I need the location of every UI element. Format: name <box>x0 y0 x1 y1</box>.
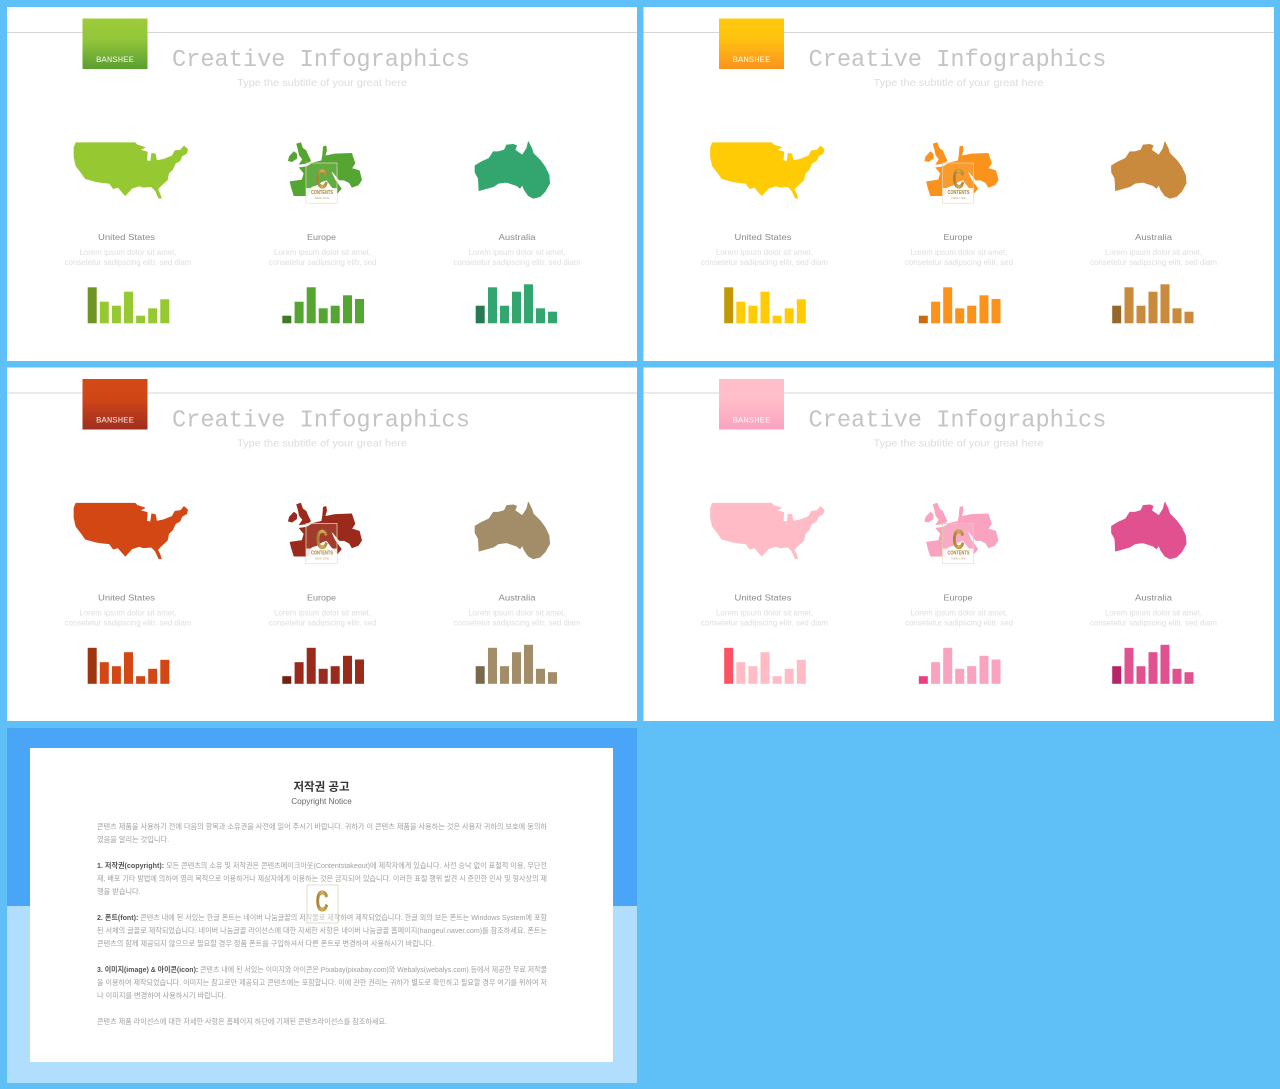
watermark logo <box>306 524 337 564</box>
label: United States: Lorem ipsum dolor sit amet, <box>80 608 176 618</box>
label: United States <box>701 232 828 267</box>
subtitle: Type the subtitle of your great here <box>874 438 1044 450</box>
label: Europe <box>268 232 376 267</box>
title band <box>719 18 784 69</box>
watermark logo: CONTENTS <box>311 550 334 556</box>
title band: BANSHEE <box>732 416 770 426</box>
title band <box>719 379 784 430</box>
label: Australia: Lorem ipsum dolor sit amet, <box>468 608 566 618</box>
section 2: font <box>97 913 547 948</box>
label: Australia: Australia <box>1135 592 1172 602</box>
subtitle: Type the subtitle of your great here <box>237 77 407 89</box>
heading: Creative Infographics <box>172 408 470 434</box>
section 3: image and icon <box>97 965 547 1000</box>
map: United States <box>74 503 188 559</box>
label: Europe: Europe <box>307 232 336 242</box>
intro paragraph <box>97 822 547 844</box>
section 3: image and icon: 나 이미지를 변경하여 사용하시기 바랍니다. <box>97 991 226 1000</box>
bar chart: Europe <box>282 287 364 323</box>
title band <box>82 18 148 69</box>
section 2: font: 2. 폰트(font): 콘텐츠 내에 된 서있는 한글 폰트는 네이버 나눔글꼴의 저작물로 제작하여 제작되었습니다. 한글 외의 보든 폰트는 Windows System에 포함 <box>97 913 547 922</box>
label: Europe: consetetur sadipscing elitr, sed <box>268 258 376 267</box>
watermark logo: CONTENTS <box>948 190 970 196</box>
subtitle: Type the subtitle of your great here <box>237 438 407 450</box>
label: Australia: Lorem ipsum dolor sit amet, <box>1105 248 1202 257</box>
label: Europe <box>905 232 1013 267</box>
watermark logo: NEW LIFE <box>315 196 329 200</box>
label: Europe <box>268 592 376 628</box>
watermark logo <box>942 163 974 203</box>
label: Australia: Lorem ipsum dolor sit amet, <box>468 248 566 257</box>
label: United States: Lorem ipsum dolor sit amet, <box>716 248 813 257</box>
panel: red slide <box>7 368 637 721</box>
bar chart: Australia <box>1112 284 1194 323</box>
map: Europe <box>925 143 998 196</box>
section 1: copyright <box>97 861 547 896</box>
watermark logo: NEW LIFE <box>951 196 966 200</box>
map: United States <box>74 143 188 198</box>
label: Europe: Europe <box>944 592 973 602</box>
title band <box>82 379 148 430</box>
panel: copyright notice <box>7 728 637 1083</box>
notice title: 저작권 공고 <box>293 780 350 794</box>
section 3: image and icon: 을 이용하여 제작되었습니다. 이미지는 참고로만 제공되고 콘텐츠에는 포함합니다. 이에 관한 권리는 귀하가 별도로 확인하고 필요할 경우 여기를 위하여 저 <box>97 978 547 987</box>
label: Europe: consetetur sadipscing elitr, sed <box>905 258 1013 267</box>
heading: Creative Infographics <box>172 47 470 74</box>
label: Australia: Australia <box>1135 232 1172 242</box>
label: Europe: consetetur sadipscing elitr, sed <box>268 618 376 628</box>
intro paragraph: 였음을 알리는 것입니다. <box>97 835 169 844</box>
label: United States <box>64 232 192 267</box>
label: Europe: Lorem ipsum dolor sit amet, <box>274 248 371 257</box>
section 1: copyright: 재, 배포 기타 방법에 의하여 영리 목적으로 이용하거나 제삼자에게 이용하는 것은 금지되어 있습니다. 이러한 표절 행위 발견 시 준민한 민사 및 형사상의 제 <box>97 874 547 883</box>
map: Europe <box>288 143 362 196</box>
label: Australia: consetetur sadipscing elitr, sed diam <box>454 258 581 267</box>
label: United States: United States <box>98 232 155 242</box>
watermark logo: C <box>316 886 328 918</box>
label: Europe: Europe <box>307 592 336 602</box>
label: Europe: Europe <box>944 232 973 242</box>
bar chart: Europe <box>282 648 364 684</box>
map: Europe <box>925 503 998 556</box>
label: United States: Lorem ipsum dolor sit amet, <box>80 248 176 257</box>
watermark logo: C <box>953 164 964 194</box>
section 2: font: 된 서체의 글꼴로 제작되었습니다. 네이버 나눔글꼴 라이선스에 대한 자세한 사항은 네이버 나눔글꼴 홈페이지(hangeul.naver.com)를 참조하세요. 폰트는 <box>97 926 547 935</box>
intro paragraph: 콘텐츠 제품을 사용하기 전에 다음의 항목과 소유권을 사전에 읽어 주시기 바랍니다. 귀하가 이 콘텐츠 제품을 사용하는 것은 사용자 귀하의 보호에 동의하 <box>97 822 547 831</box>
label: United States: consetetur sadipscing elitr, sed diam <box>701 258 828 267</box>
panel: green slide <box>7 7 637 361</box>
bar chart: United States <box>724 287 806 323</box>
title band: BANSHEE <box>96 55 134 65</box>
section 3: image and icon: 3. 이미지(image) & 아이콘(icon): 콘텐츠 내에 된 서있는 이미지와 아이콘은 Pixabay(pixabay.com)와 Webalys(webalys.com) 등에서 제공한 무료 저작물 <box>97 965 547 974</box>
section 1: copyright: 1. 저작권(copyright): 모든 콘텐츠의 소유 및 저작권은 콘텐츠메이크아웃(Contentstakeout)에 제작자에게 있습니다. 사전 승낙 없이 표절적 이용, 무단전 <box>97 861 547 870</box>
watermark logo <box>307 885 338 923</box>
label: United States <box>64 592 192 628</box>
label: Australia <box>1090 592 1217 628</box>
bar chart: Australia <box>1112 645 1194 684</box>
label: Australia: Lorem ipsum dolor sit amet, <box>1105 608 1202 618</box>
heading: Creative Infographics <box>808 47 1106 74</box>
label: United States: Lorem ipsum dolor sit amet, <box>716 608 813 618</box>
panel: pink slide <box>644 368 1274 721</box>
title band: BANSHEE <box>96 416 134 426</box>
heading: Creative Infographics <box>808 408 1106 434</box>
watermark logo: CONTENTS <box>311 190 334 196</box>
subtitle: Type the subtitle of your great here <box>874 77 1044 89</box>
label: Australia: consetetur sadipscing elitr, sed diam <box>454 618 581 628</box>
watermark logo: C <box>316 524 328 555</box>
watermark logo: NEW LIFE <box>951 556 966 560</box>
label: United States: consetetur sadipscing elitr, sed diam <box>64 258 192 267</box>
bar chart: Australia <box>476 284 557 323</box>
panel: yellow slide <box>644 7 1274 361</box>
watermark logo <box>942 524 974 564</box>
section 1: copyright: 행을 받습니다. <box>97 887 141 896</box>
label: Australia <box>454 232 581 267</box>
bar chart: Europe <box>919 648 1000 684</box>
label: United States: United States <box>734 232 792 242</box>
title band: BANSHEE <box>732 55 770 65</box>
label: Australia <box>454 592 581 628</box>
closing line: 콘텐츠 제품 라이선스에 대한 자세한 사항은 홈페이지 하단에 기재된 콘텐츠라이선스를 참조하세요. <box>97 1017 387 1026</box>
label: Australia: Australia <box>498 232 536 242</box>
bar chart: Australia <box>476 645 557 684</box>
label: Europe <box>905 592 1013 628</box>
watermark logo <box>306 163 337 203</box>
label: Europe: Lorem ipsum dolor sit amet, <box>910 608 1008 618</box>
label: Australia: consetetur sadipscing elitr, sed diam <box>1090 618 1217 628</box>
label: Australia <box>1090 232 1217 267</box>
map: Australia <box>475 502 550 559</box>
map: United States <box>710 503 824 559</box>
watermark logo: CONTENTS <box>948 550 970 556</box>
label: Europe: Lorem ipsum dolor sit amet, <box>274 608 371 618</box>
map: Australia <box>1111 142 1186 198</box>
bar chart: United States <box>88 648 169 684</box>
map: Australia <box>1111 502 1186 559</box>
bar chart: United States <box>724 648 806 684</box>
label: Australia: Australia <box>498 592 536 602</box>
label: Europe: Lorem ipsum dolor sit amet, <box>910 248 1008 257</box>
watermark logo: NEW LIFE <box>315 556 329 560</box>
map: Europe <box>288 503 362 556</box>
label: Europe: consetetur sadipscing elitr, sed <box>905 618 1013 628</box>
watermark logo: C <box>316 164 328 194</box>
map: United States <box>710 143 824 198</box>
notice subtitle: Copyright Notice <box>291 797 352 806</box>
label: United States <box>701 592 828 628</box>
label: United States: consetetur sadipscing elitr, sed diam <box>701 618 828 628</box>
label: Australia: consetetur sadipscing elitr, sed diam <box>1090 258 1217 267</box>
bar chart: United States <box>88 287 169 323</box>
label: United States: United States <box>98 592 155 602</box>
map: Australia <box>475 142 550 198</box>
label: United States: United States <box>734 592 792 602</box>
label: United States: consetetur sadipscing elitr, sed diam <box>64 618 192 628</box>
watermark logo: C <box>953 524 964 555</box>
section 2: font: 콘텐츠의 함께 제공되지 않으므로 필요할 경우 정품 폰트를 구입하셔서 다른 폰트로 변경하여 사용하시기 바랍니다. <box>97 939 434 948</box>
bar chart: Europe <box>919 287 1000 323</box>
